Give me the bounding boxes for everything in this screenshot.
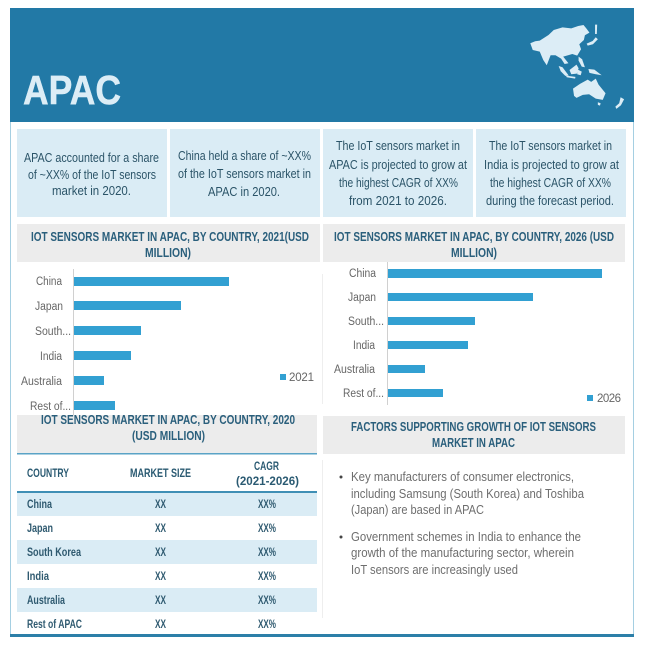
bar chart: 2026: Japan: [348, 292, 376, 304]
table header: CAGR: [254, 459, 279, 473]
text block: factors list: IoT sensors are increasingly used: [351, 563, 518, 577]
table: market size: XX: [155, 545, 166, 559]
card: APAC growth: The IoT sensors market in: [336, 138, 460, 153]
card: China share: APAC in 2020.: [208, 184, 280, 199]
table header: COUNTRY: [27, 466, 69, 480]
table: market size: Rest of APAC: [27, 617, 82, 631]
bar chart: 2026: South...: [348, 316, 384, 328]
card: China share: [170, 129, 320, 217]
bar chart: 2021: Rest of...: [30, 401, 71, 413]
table: market size: XX: [155, 521, 166, 535]
bar chart: 2026: [322, 262, 621, 405]
heading: 2021 chart: IOT SENSORS MARKET IN APAC, BY COUNTRY, 2021(USD: [31, 229, 309, 244]
card: APAC growth: from 2021 to 2026.: [349, 193, 447, 208]
bar chart: 2021: India: [40, 351, 63, 363]
text block: factors list: growth of the manufacturing sector, wherein: [351, 546, 574, 560]
legend: 2026: [597, 393, 621, 405]
bar chart: 2021: Australia: [21, 376, 63, 388]
table: market size: South Korea: [27, 545, 81, 559]
heading: 2020 table: (USD MILLION): [132, 428, 205, 443]
card: APAC share: [17, 129, 167, 217]
legend: 2021: [289, 372, 314, 384]
table: market size: XX: [155, 593, 166, 607]
table header: MARKET SIZE: [130, 466, 191, 480]
table: market size: Australia: [27, 593, 65, 607]
bar chart: 2026: India: [353, 340, 376, 352]
table: market size: [17, 453, 317, 631]
table header: (2021-2026): [236, 474, 299, 488]
card: APAC share: market in 2020.: [52, 183, 131, 198]
table: market size: Japan: [27, 521, 53, 535]
table: market size: India: [27, 569, 49, 583]
heading: 2021 chart: [17, 224, 320, 262]
card: APAC growth: [323, 129, 473, 217]
card: India growth: during the forecast period.: [486, 193, 614, 208]
title: APAC: [23, 67, 121, 113]
text block: factors list: including Samsung (South Korea) and Toshiba: [351, 487, 584, 501]
heading: 2020 table: [17, 412, 317, 453]
heading: 2026 chart: [323, 224, 625, 262]
bar chart: 2021: South...: [35, 326, 71, 338]
card: India growth: the highest CAGR of XX%: [490, 175, 611, 190]
bar chart: 2026: China: [349, 268, 377, 280]
table: market size: XX%: [258, 497, 276, 511]
card: India growth: The IoT sensors market in: [489, 138, 612, 153]
card: APAC growth: APAC is projected to grow at: [329, 157, 467, 172]
table: market size: XX%: [258, 521, 276, 535]
bar chart: 2021: Japan: [35, 301, 63, 313]
card: China share: of the IoT sensors market in: [178, 166, 311, 181]
header banner: [10, 8, 634, 122]
table: market size: XX: [155, 569, 166, 583]
heading: 2020 table: IOT SENSORS MARKET IN APAC, BY COUNTRY, 2020: [41, 412, 295, 427]
text block: factors list: Government schemes in India to enhance the: [351, 530, 581, 544]
table: market size: XX%: [258, 617, 276, 631]
card: China share: China held a share of ~XX%: [178, 148, 311, 163]
table: market size: XX%: [258, 593, 276, 607]
card: APAC share: APAC accounted for a share: [24, 150, 159, 165]
text block: factors list: [322, 460, 584, 618]
bar chart: 2026: Rest of...: [343, 388, 384, 400]
heading: factors: [323, 416, 625, 454]
text block: factors list: (Japan) are based in APAC: [351, 503, 484, 517]
bar chart: 2021: [21, 269, 314, 415]
card: APAC share: of ~XX% of the IoT sensors: [28, 167, 156, 182]
bar chart: 2021: China: [36, 276, 63, 288]
table: market size: XX%: [258, 569, 276, 583]
text block: factors list: Key manufacturers of consumer electronics,: [351, 470, 574, 484]
heading: 2026 chart: MILLION): [451, 245, 497, 260]
table header: [27, 459, 299, 488]
card: APAC growth: the highest CAGR of XX%: [339, 175, 458, 190]
table: market size: XX: [155, 497, 166, 511]
table: market size: XX%: [258, 545, 276, 559]
heading: 2021 chart: MILLION): [145, 245, 191, 260]
card: India growth: India is projected to grow at: [484, 157, 619, 172]
icon: APAC map: [530, 25, 624, 109]
table: market size: China: [27, 497, 52, 511]
heading: factors: MARKET IN APAC: [432, 435, 515, 450]
bar chart: 2026: Australia: [334, 364, 376, 376]
table: market size: XX: [155, 617, 166, 631]
card: India growth: [476, 129, 626, 217]
